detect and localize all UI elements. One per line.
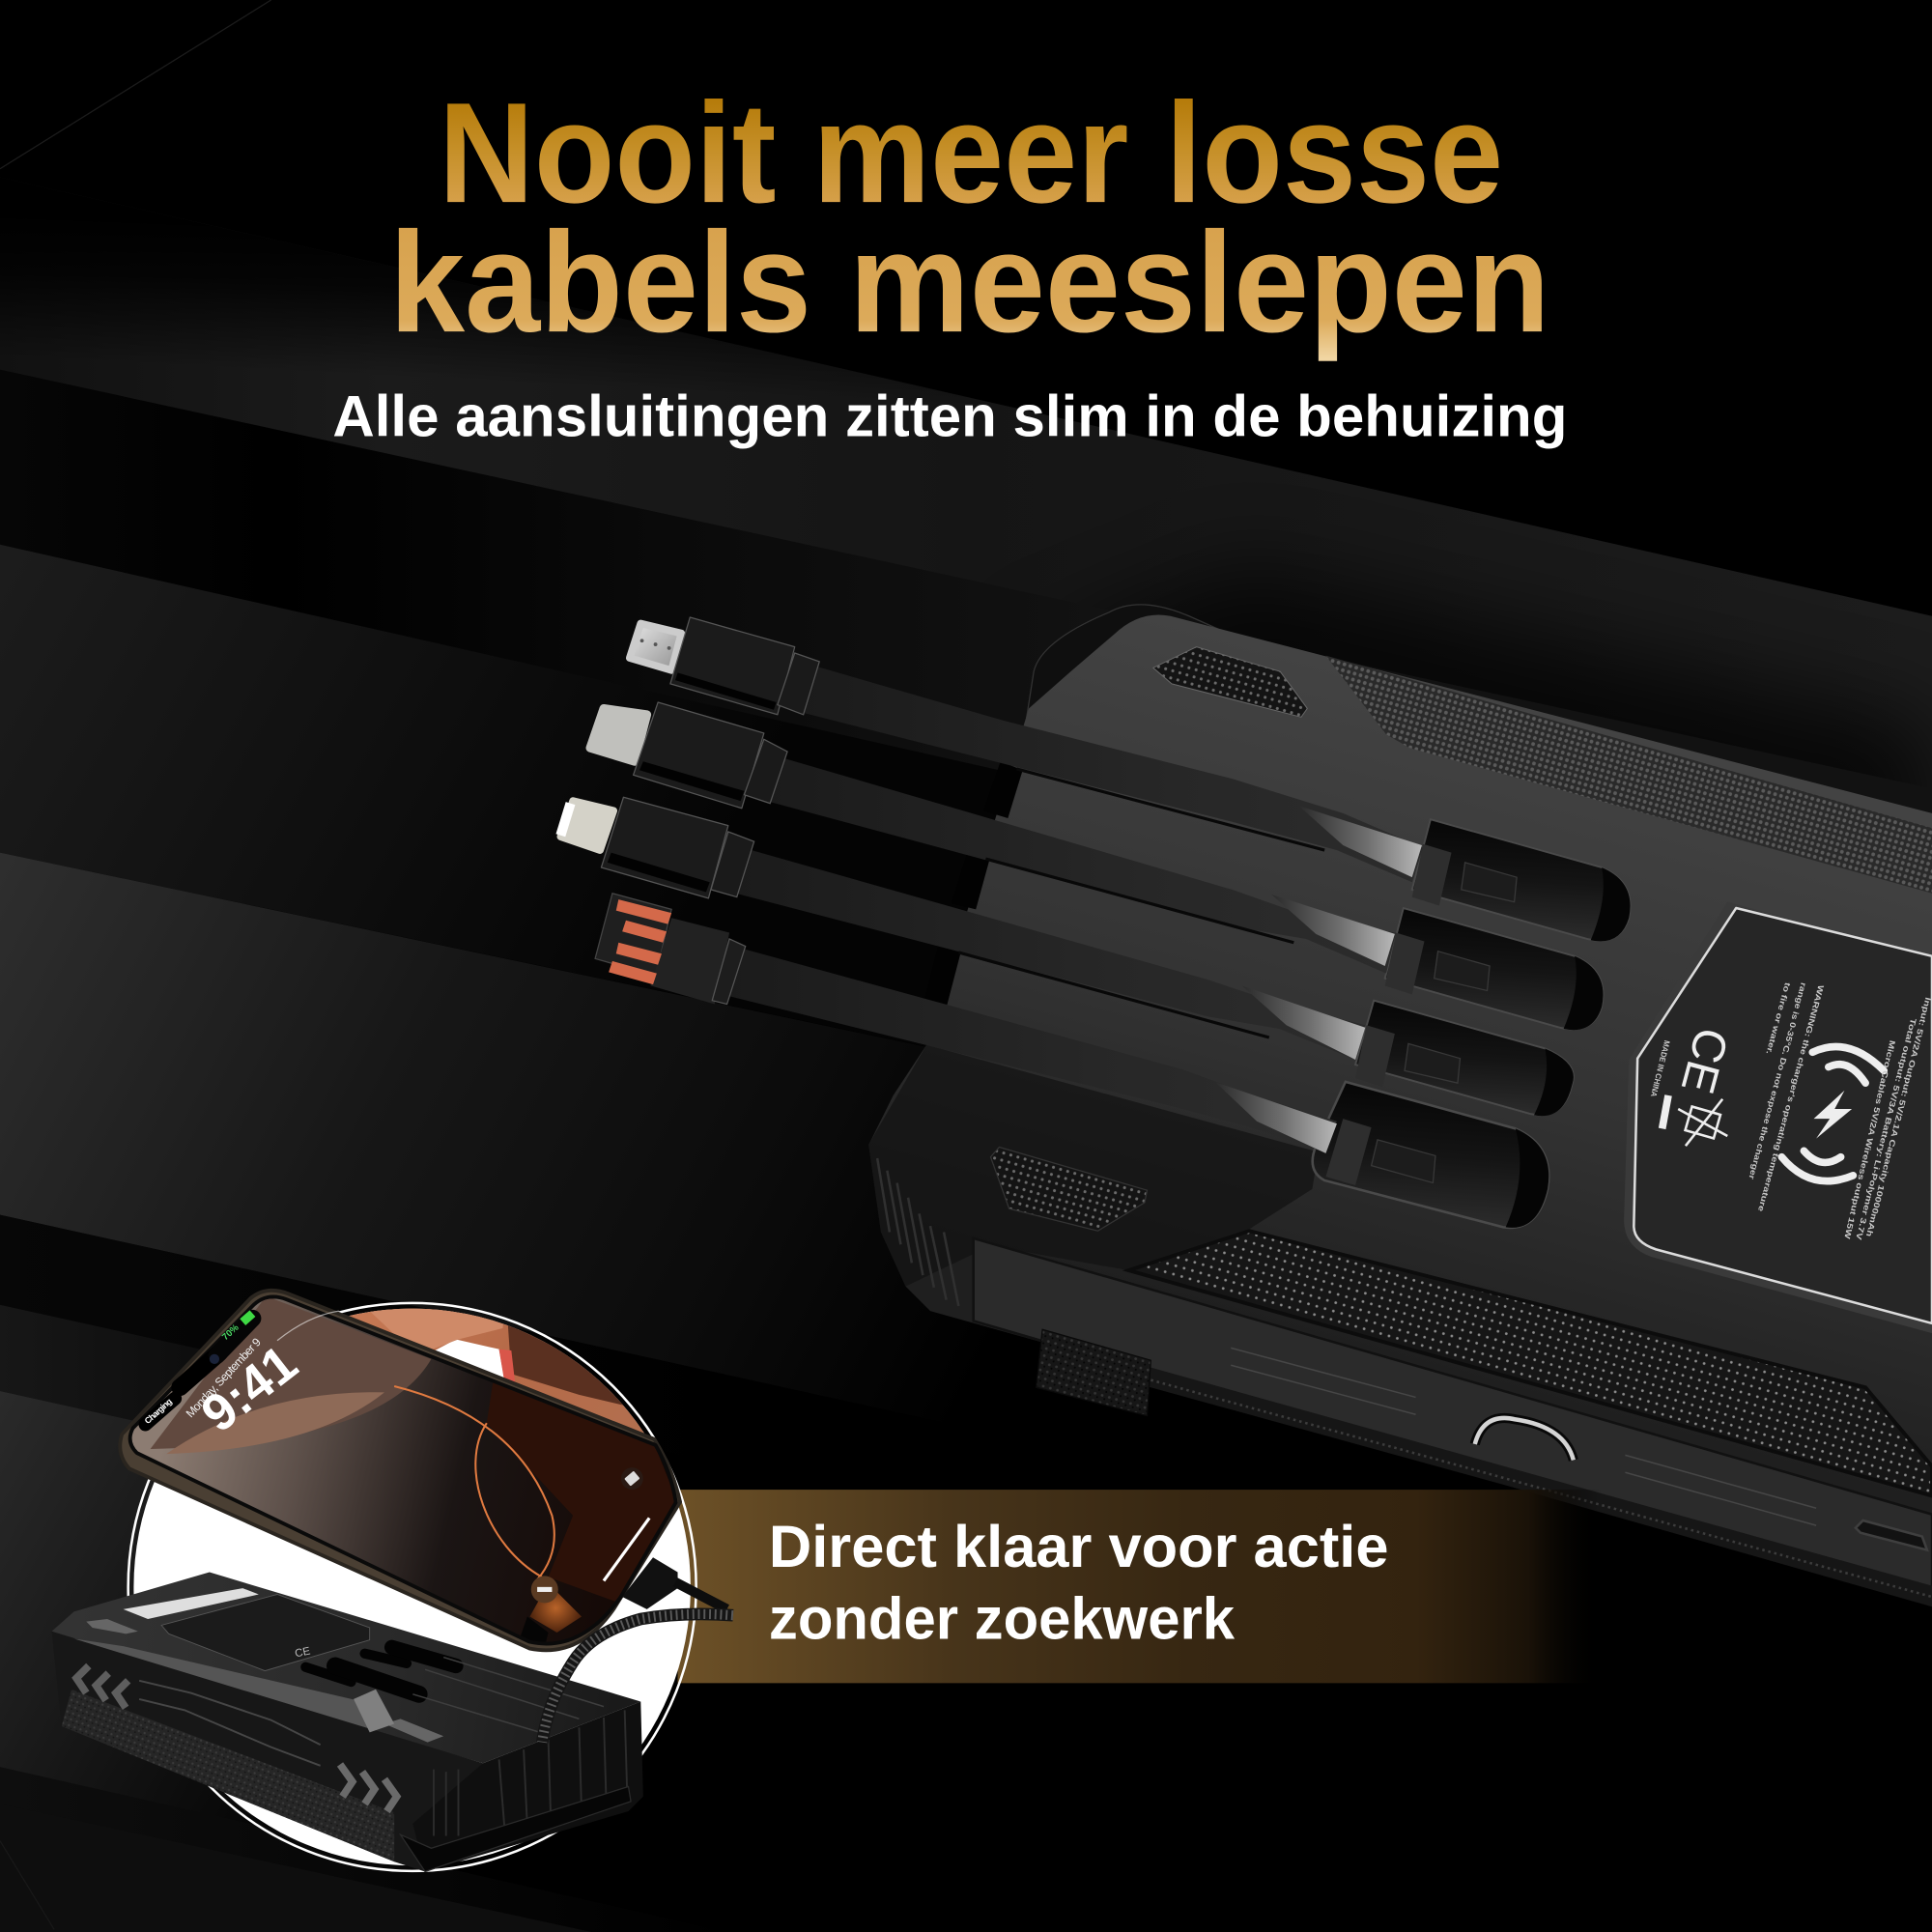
mini texture strip [74,1638,370,1729]
black gaps beside pull tabs [924,761,1023,1008]
micro USB cable [630,617,1423,882]
subtitle: Alle aansluitingen zitten slim in de behuizing [332,384,1567,449]
velcro strap [1037,1329,1151,1416]
inset circle [128,1282,739,1871]
small power bank [52,1573,643,1872]
plate small print [1649,981,1932,1241]
title: kabels meeslepen [389,203,1550,362]
plate small print: Input: 5V/2A Output: 5V/2.1A Capacity 10000mAh [1864,996,1932,1237]
title: Nooit meer losse [439,73,1503,233]
bottom grip pad [991,1148,1148,1231]
cable slot 1 [1412,819,1631,941]
side port [1856,1520,1927,1550]
top ribbing [412,1658,604,1735]
callout text: Direct klaar voor actie [769,1514,1388,1579]
phone [111,1282,702,1663]
bank top face [52,1573,640,1763]
side engraved lines [1231,1348,1816,1525]
lower side strip [974,1238,1932,1588]
phone frame [120,1291,680,1650]
hand behind phone [349,1308,644,1434]
metal ring [1475,1418,1574,1460]
Lightning cable [560,797,1365,1060]
mini grip pads [86,1619,443,1743]
bottom texture panel [1128,1231,1932,1495]
plate small print: to fire or water. [1764,981,1793,1056]
recycling icon [1662,1095,1727,1146]
front engraved lines [139,1681,321,1766]
callout text: zonder zoekwerk [769,1585,1236,1651]
power bank body [868,614,1932,1588]
window highlight [124,1588,259,1619]
dark lower-left corner shading [868,1045,1319,1287]
mini wireless plate: CE [294,1645,312,1660]
top texture panel [1325,656,1932,894]
corner ribs [877,1158,958,1306]
plate small print: WARNING: the charger's operating temperature [1756,984,1826,1213]
right chevrons [340,1765,397,1811]
leather bottom edge [1041,1337,1932,1606]
plate small print: range is 0-35°C. Do not expose the charger [1747,981,1809,1181]
CE mark: CE [1671,1022,1738,1098]
right side ribs [434,1710,627,1836]
lock screen wallpaper [131,1298,674,1642]
plate small print: Total output: 5V/3A Battery: Li-Polymer 3.7V [1854,1017,1918,1241]
mini slots [305,1647,456,1694]
USB-C cable [590,702,1396,974]
circle reflection over phone [277,1311,339,1341]
leather panel [62,1690,394,1861]
bank bottom strap [401,1786,631,1872]
title [389,73,1550,362]
date: Monday, September 9 [184,1335,264,1420]
back shell of power bank [1025,605,1244,752]
left chevrons [76,1665,128,1708]
USB-A cable [595,894,1337,1153]
charging label: Charging [143,1397,174,1426]
cable slot 4 [1313,1082,1548,1228]
cable slot 2 [1385,908,1604,1030]
wireless plate [1624,902,1932,1333]
plate small print: Micro Cables 5V/2A Wireless output 15W [1842,1039,1897,1240]
plate small print: MADE IN CHINA [1649,1039,1672,1098]
home bar [604,1518,649,1580]
braided cable [542,1614,733,1743]
callout text [769,1514,1389,1651]
top grip pad [1153,647,1307,717]
bank right side [412,1701,643,1872]
main power bank product [560,605,1932,1606]
status pills [146,1314,252,1424]
metal accent [354,1690,394,1732]
battery percent: 70% [220,1322,242,1343]
cable slot 3 [1355,1001,1574,1116]
camera button [621,1467,643,1490]
flashlight button [531,1576,558,1603]
bank front face [52,1632,483,1872]
phone cable [622,1557,727,1609]
stitching [1151,1380,1932,1597]
mini wireless plate [161,1595,370,1671]
callout band [678,1490,1602,1683]
lock screen time: 9:41 [191,1335,308,1443]
wireless charging symbol [1781,1046,1884,1181]
